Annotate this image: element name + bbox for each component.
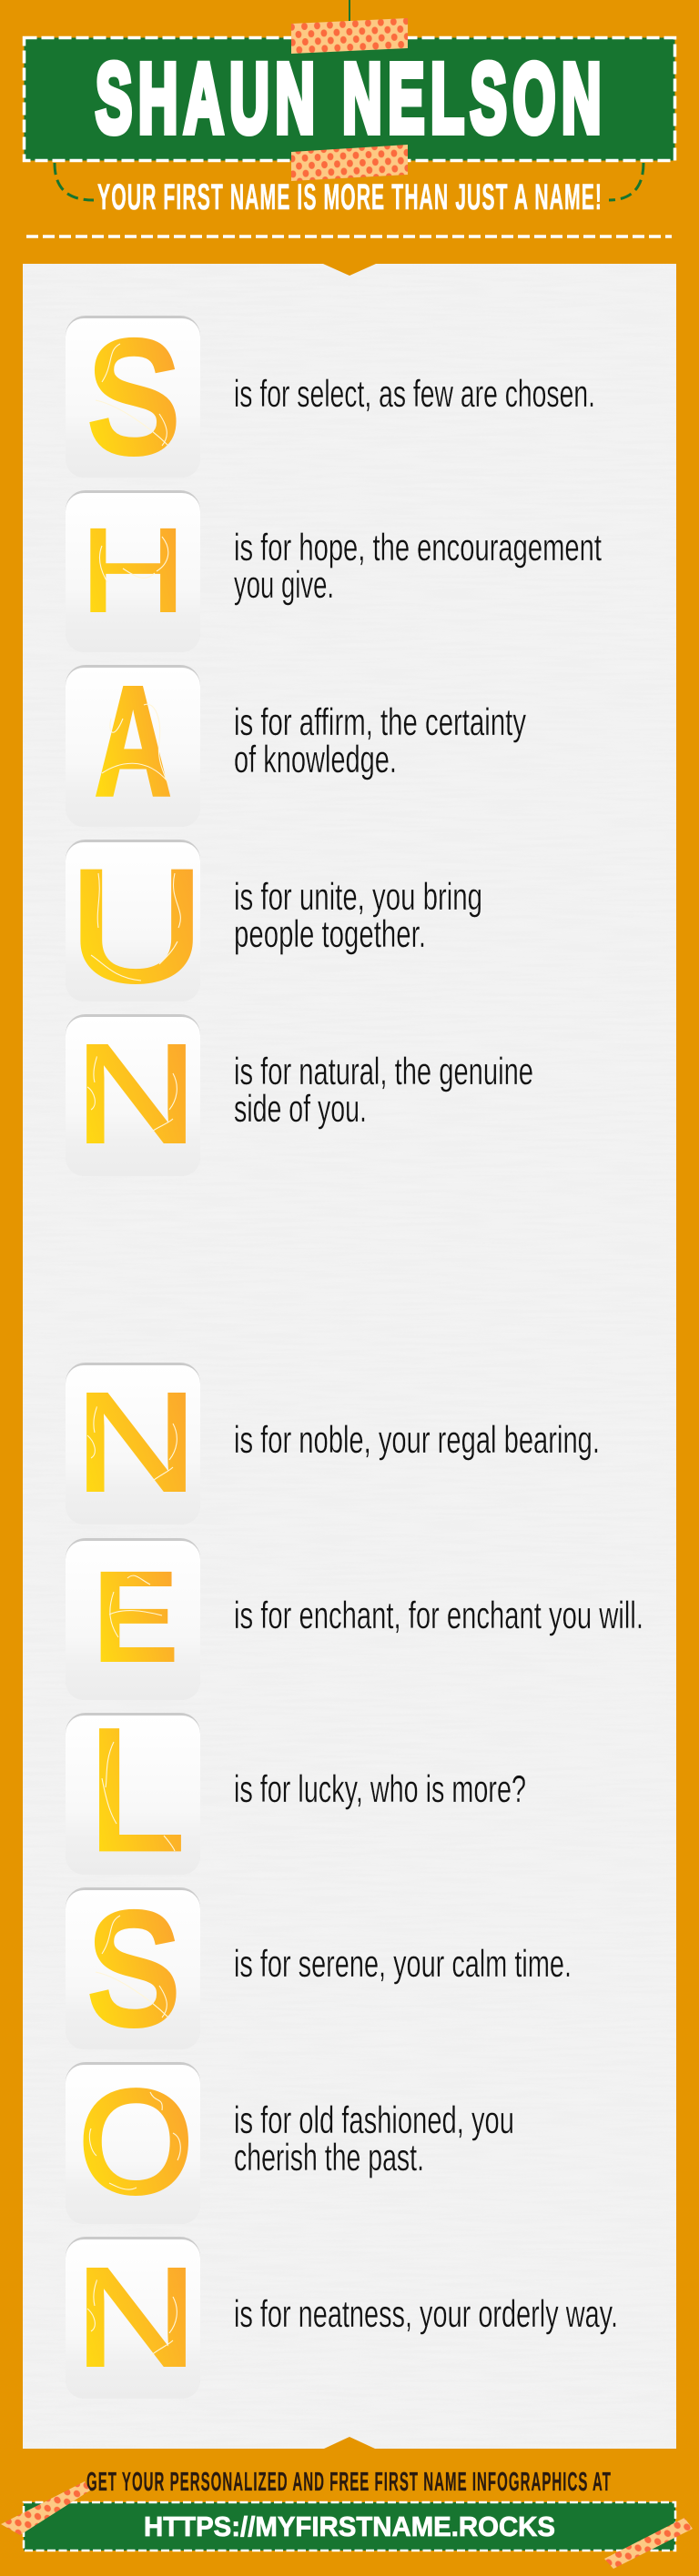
tile: S: S (87, 1881, 179, 2057)
url banner (24, 2502, 675, 2551)
right curved dashes (609, 163, 643, 200)
tile: E: E (92, 1544, 179, 1690)
url: HTTPS://MYFIRSTNAME.ROCKS (144, 2511, 555, 2542)
tile: N: N (75, 1016, 198, 1172)
row: U (66, 837, 482, 1016)
description: is for old fashioned, you (234, 2098, 514, 2141)
row: H (66, 490, 602, 652)
footer (1, 2468, 693, 2569)
title banner (24, 38, 675, 160)
description (234, 2098, 514, 2179)
description (234, 700, 526, 780)
tile: H (66, 490, 200, 652)
row: A (66, 655, 526, 829)
description (234, 875, 482, 955)
main panel (23, 264, 676, 2449)
left tape (1, 2481, 90, 2535)
right tape (604, 2518, 693, 2569)
hanging string (349, 0, 350, 22)
description: of knowledge. (234, 738, 397, 780)
left curved dashes (55, 163, 94, 200)
tile: S (66, 1881, 200, 2057)
tile: E (66, 1538, 200, 1700)
description: is for natural, the genuine (234, 1050, 533, 1092)
description: side of you. (234, 1087, 367, 1130)
row: L (66, 1692, 526, 1887)
tile: A: A (95, 655, 172, 829)
description (234, 1050, 533, 1130)
title: SHAUN NELSON (96, 45, 607, 153)
bottom notch (324, 2437, 375, 2449)
tile: L: L (86, 1692, 185, 1887)
row: S (66, 309, 595, 485)
row: N (66, 2237, 618, 2399)
row: S (66, 1881, 572, 2057)
top notch (323, 264, 376, 276)
description (234, 526, 602, 606)
row: O (66, 2060, 514, 2224)
top tape (291, 18, 408, 54)
tile: N: N (75, 1364, 198, 1521)
row: E (66, 1538, 643, 1700)
tile: N: N (75, 2239, 198, 2396)
tile: S: S (87, 309, 179, 485)
header (24, 0, 675, 217)
description: is for lucky, who is more? (234, 1767, 526, 1810)
description: people together. (234, 912, 426, 955)
bottom tape (291, 145, 408, 181)
row: N (66, 1014, 533, 1176)
row: N (66, 1363, 600, 1524)
tile: H: H (79, 503, 187, 638)
description: is for unite, you bring (234, 875, 482, 918)
tile: S (66, 309, 200, 485)
tile: U: U (67, 837, 206, 1016)
tile: O: O (78, 2060, 193, 2224)
tile: A (66, 655, 200, 829)
description: you give. (234, 563, 334, 606)
description: is for affirm, the certainty (234, 700, 526, 743)
description: cherish the past. (234, 2136, 424, 2179)
